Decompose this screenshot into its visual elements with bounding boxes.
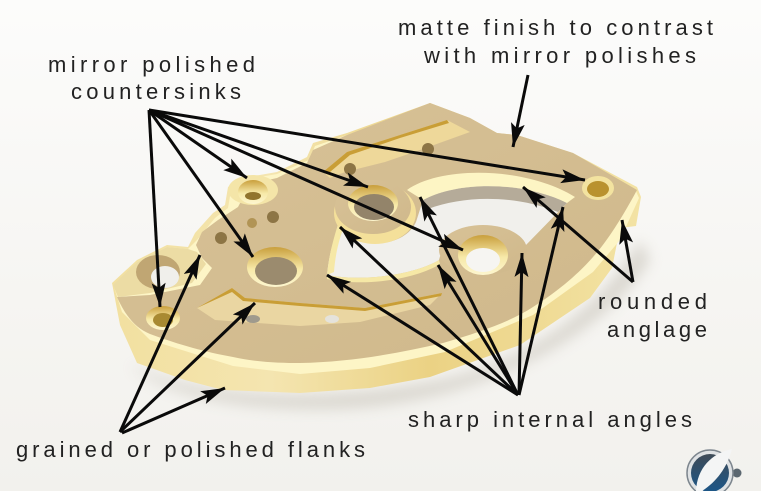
- label: countersinks: countersinks: [71, 79, 241, 104]
- lower pocket: [197, 288, 442, 326]
- left polished lobe: [113, 247, 206, 297]
- arrows: sharp internal angles: [327, 197, 563, 395]
- arrows: grained or polished flanks: [120, 255, 255, 433]
- upper pocket: [323, 120, 470, 178]
- arrow: matte finish: [513, 75, 528, 147]
- label: rounded: rounded: [598, 289, 707, 314]
- outer flank: [112, 103, 641, 393]
- icon: quill logo: [687, 449, 742, 491]
- plate shadow: [130, 240, 650, 409]
- barrel lobe countersink: [334, 180, 416, 244]
- arrows: rounded anglage: [523, 187, 633, 282]
- label: matte finish: matte finish to contrast: [398, 15, 713, 40]
- arrows: mirror polished countersinks: [149, 110, 585, 307]
- large left hole: [136, 255, 180, 289]
- central left countersink: [247, 247, 303, 287]
- polished rim: [114, 106, 639, 374]
- central window opening: [327, 173, 575, 282]
- label: anglage: anglage: [607, 317, 707, 342]
- label: mirror polishes: with mirror polishes: [423, 43, 696, 68]
- grained face: [117, 103, 637, 363]
- label: mirror polished: mirror polished: [48, 52, 255, 77]
- label: grained or polished flanks: grained or polished flanks: [16, 437, 365, 462]
- right lobe countersink: [439, 225, 527, 275]
- gold plate: [112, 103, 650, 409]
- label: sharp internal angles: sharp internal angles: [408, 407, 692, 432]
- small hole cluster: [215, 143, 434, 323]
- countersink upper lobe: [228, 175, 278, 205]
- countersink lower left: [146, 306, 180, 330]
- countersink far right: [582, 176, 614, 200]
